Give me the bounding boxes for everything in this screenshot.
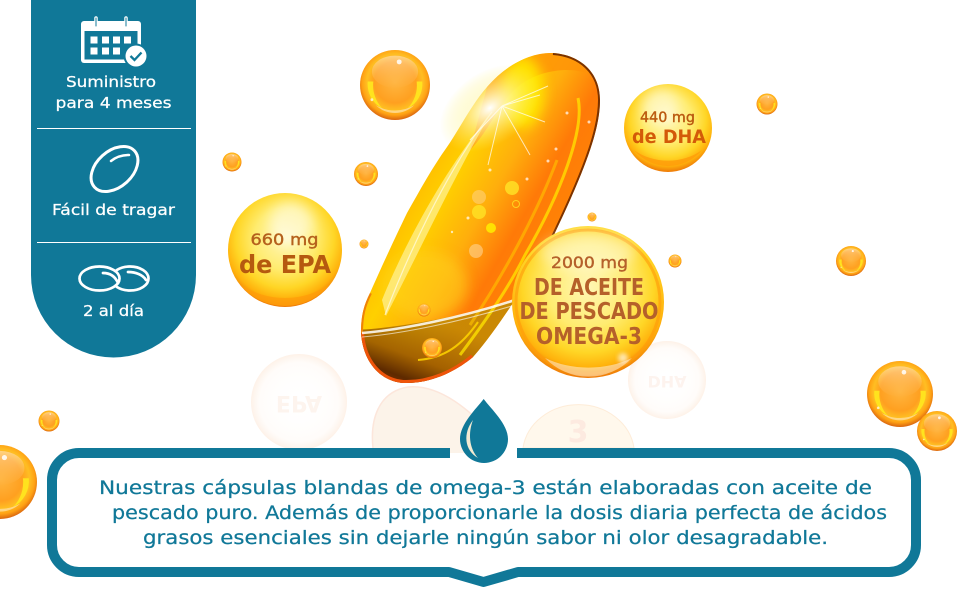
label: supply second line: para 4 meses: [56, 94, 172, 112]
label: easy to swallow: Fácil de tragar: [52, 201, 176, 219]
text: de aceite: DE ACEITE: [534, 273, 644, 301]
bubble: 440 mg DHA: [624, 84, 712, 172]
sidebar panel: [31, 0, 196, 357]
reflection: EPA bubble: EPA: [276, 390, 322, 415]
text: de DHA: de DHA: [632, 126, 706, 148]
callout text line 1: Nuestras cápsulas blandas de omega-3 están elaboradas con aceite de: [99, 477, 872, 499]
callout text line 3: grasos esenciales sin dejarle ningún sabor ni olor desagradable.: [143, 527, 828, 549]
label: two per day: 2 al día: [83, 302, 144, 320]
text: 660 mg: 660 mg: [250, 230, 318, 249]
reflection: DHA bubble: [628, 341, 706, 419]
text: de pescado: DE PESCADO: [520, 297, 658, 325]
text: 440 mg: 440 mg: [640, 110, 695, 126]
label: supply: Suministro: [66, 73, 156, 91]
text: 2000 mg: 2000 mg: [551, 253, 628, 272]
callout box: [52, 453, 916, 582]
reflection: omega bubble: [523, 405, 634, 450]
text: omega-3: OMEGA-3: [536, 322, 642, 350]
reflection: EPA bubble: [251, 354, 347, 450]
reflection: omega bubble: 3: [568, 415, 588, 450]
icon: water drop: [460, 399, 508, 463]
capsule illustration: [355, 46, 600, 390]
callout text line 2: pescado puro. Además de proporcionarle la dosis diaria perfecta de ácidos: [112, 502, 887, 524]
reflection: capsule: [372, 387, 498, 458]
icon: two capsules: [80, 266, 148, 290]
bubble: 2000 mg omega-3: [512, 226, 664, 378]
icon: calendar with check: [81, 18, 148, 68]
bubble: 660 mg EPA: [228, 193, 342, 307]
reflection: DHA bubble: DHA: [647, 372, 687, 391]
text: de EPA: de EPA: [239, 250, 332, 279]
small oil bubbles: [0, 50, 957, 519]
icon: soft capsule: [82, 138, 147, 200]
